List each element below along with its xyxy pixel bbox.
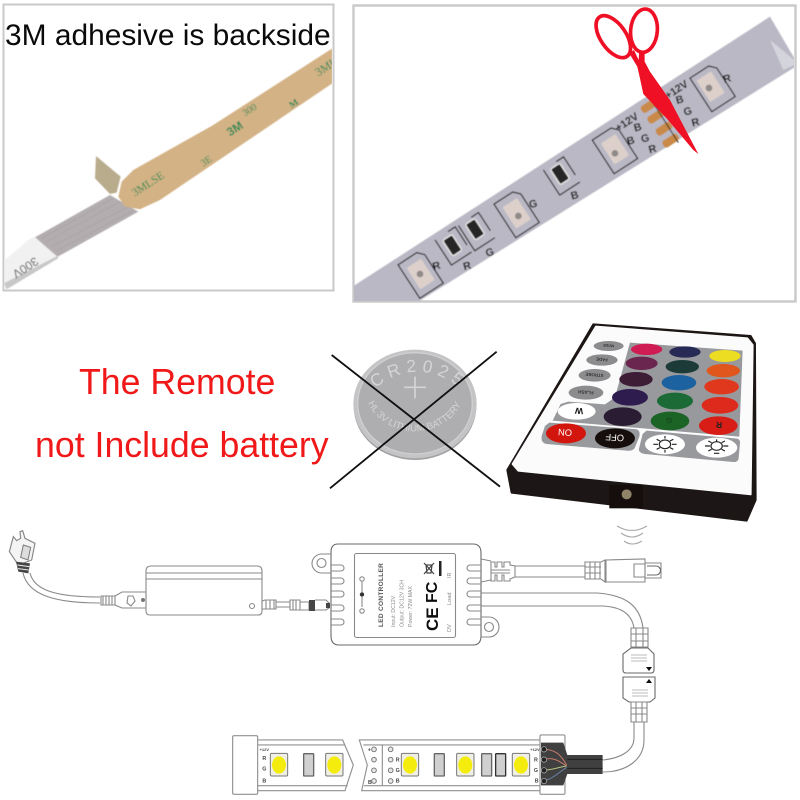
resistors — [304, 754, 506, 776]
strip pad labels: G — [396, 768, 400, 774]
remote control photo: FADE — [596, 357, 608, 362]
adhesive tape photo: 3M — [224, 118, 246, 139]
IR receiver cable — [481, 559, 661, 582]
polarity symbol — [360, 577, 364, 613]
strip pad labels: G — [534, 768, 538, 774]
power adapter — [101, 566, 330, 615]
text: The Remote not Include battery: not Include battery — [35, 425, 329, 465]
controller label text: DV — [447, 624, 453, 632]
adhesive tape photo: M — [288, 98, 301, 111]
remote control photo: FLASH — [577, 389, 594, 395]
controller label text: Power: 72W MAX — [408, 586, 414, 627]
LED strip photo: G — [528, 198, 539, 211]
strip pad labels: + — [368, 747, 371, 753]
LED controller box — [312, 544, 499, 645]
remote control photo: ON — [558, 427, 572, 438]
controller label text: Input: DC12V — [391, 595, 397, 627]
strip pad labels — [260, 747, 540, 786]
controller label text: FC — [424, 581, 441, 603]
text: The Remote not Include battery — [35, 362, 329, 465]
strip right section — [359, 740, 540, 791]
adhesive tape photo: 300V — [10, 254, 41, 281]
waterproof connector — [603, 648, 655, 772]
LED strip photo: R — [722, 72, 733, 86]
controller label text — [378, 563, 453, 632]
strip pad labels: B — [262, 778, 266, 784]
LED strip photo: G — [682, 105, 693, 119]
LED strip photo: R — [462, 260, 473, 273]
adhesive tape photo: 3MLSE — [130, 170, 167, 199]
load cable — [481, 593, 648, 647]
icon: WEEE bin — [424, 561, 442, 576]
wiring diagram — [9, 526, 661, 794]
LED strip photo: R — [690, 116, 701, 130]
strip end cap right — [540, 735, 565, 794]
panel: LED strip with scissors photo — [350, 6, 798, 302]
icon: red scissors — [589, 8, 698, 154]
remote control photo: STROBE — [585, 372, 604, 378]
adhesive tape photo: 3MLSE — [312, 47, 352, 79]
controller label text: LED CONTROLLER — [378, 563, 385, 627]
remote control photo: OFF — [605, 432, 624, 443]
icon: crossed out CR2025 battery: CR2025 — [371, 360, 463, 386]
remote control photo: MODE — [602, 343, 614, 348]
icon: AC wall plug — [9, 531, 35, 573]
remote control photo: W — [574, 406, 584, 416]
panel: 3M adhesive backside photo — [4, 4, 352, 290]
strip pad labels: +12V — [260, 747, 269, 752]
remote control photo: R — [715, 420, 723, 430]
strip end cap left — [233, 736, 258, 794]
LED strip photo: B — [626, 134, 636, 148]
strip pad labels: R — [262, 756, 266, 762]
strip pad labels: R — [396, 757, 400, 763]
LED strip photo: +12V — [663, 78, 691, 102]
LED strip photo: G — [640, 132, 651, 146]
power cable — [23, 573, 100, 603]
remote control photo: G — [666, 415, 673, 425]
controller label text: IR — [447, 572, 453, 578]
controller label text: Load — [447, 593, 453, 605]
text: The Remote not Include battery: The Remote — [79, 362, 275, 402]
LED strip photo: R — [647, 143, 658, 156]
strip pad labels: B — [535, 779, 539, 785]
LED strip photo: R — [431, 260, 442, 273]
fins — [331, 565, 481, 625]
caption: 3M adhesive is backside: 3M adhesive is backside — [5, 19, 331, 52]
mounting ears — [312, 554, 499, 637]
solder block and black sleeve — [541, 743, 603, 785]
adhesive tape photo: 300 — [241, 102, 259, 119]
strip pad labels: B — [368, 780, 372, 786]
strip pad labels: G — [262, 767, 266, 773]
remote control photo — [507, 324, 756, 521]
adhesive tape photo — [4, 47, 352, 289]
LED strip photo: G — [484, 246, 495, 260]
LED strip photo: B — [633, 121, 643, 135]
LED strip photo: +12V — [613, 110, 642, 134]
strip pad labels: R — [534, 758, 538, 764]
adhesive tape photo: 3E — [199, 154, 214, 169]
strip left section — [258, 740, 353, 791]
icon: crossed out CR2025 battery — [330, 350, 500, 489]
LED strip photo: B — [570, 189, 580, 203]
solder pads — [372, 747, 393, 783]
controller label text: Output: DC12V 3CH — [400, 580, 406, 627]
icon: IR signal waves — [617, 526, 647, 544]
strip pad labels: +12V — [530, 747, 540, 752]
LED strip photo: B — [675, 93, 685, 107]
yellow LEDs — [270, 753, 530, 776]
controller label text: CE — [423, 607, 442, 631]
icon: crossed out CR2025 battery: HL 3V LITHIUM BATTERY — [368, 400, 460, 432]
LED strip diagram — [233, 735, 603, 794]
strip pad labels: B — [396, 779, 400, 785]
LED strip photo — [350, 17, 798, 302]
